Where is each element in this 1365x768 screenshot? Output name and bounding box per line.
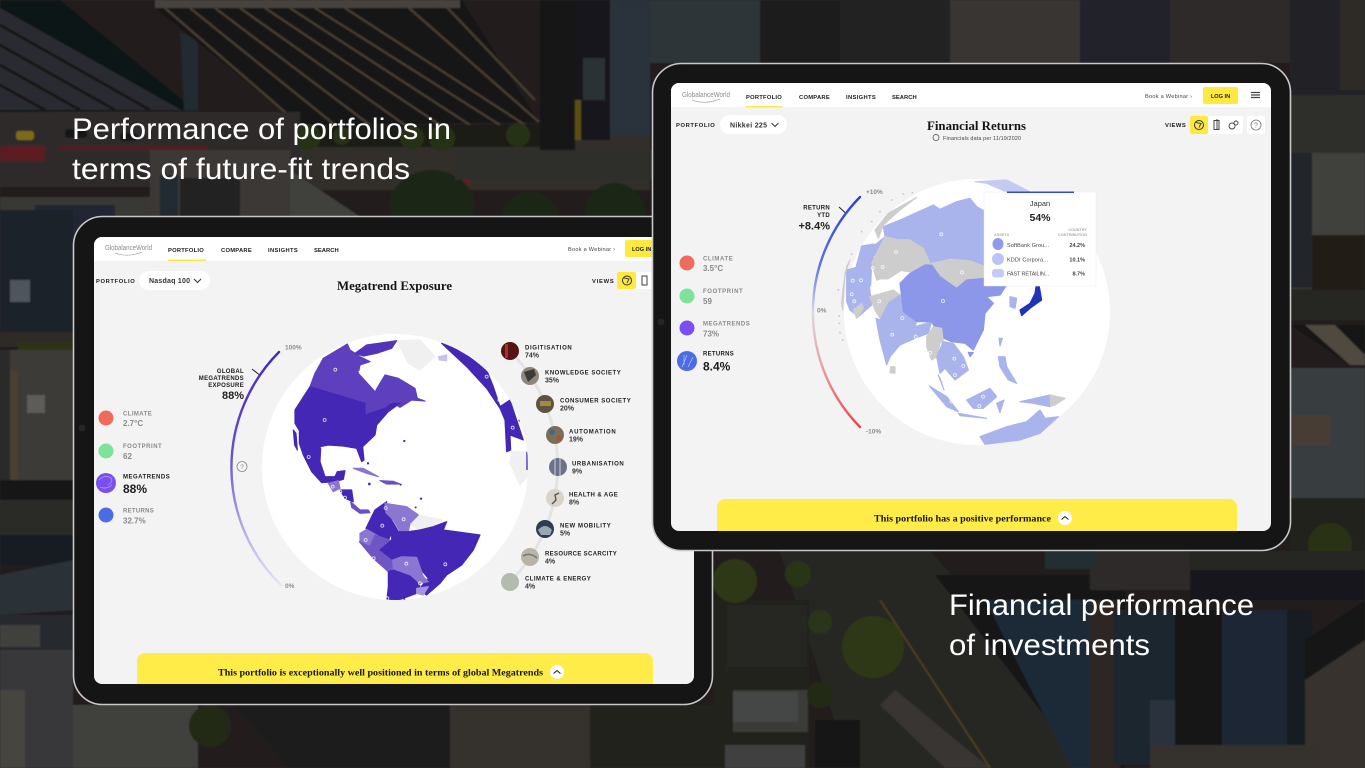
screen [671,83,1271,531]
left metrics: 88% [123,482,147,496]
return arc: 0% [817,308,827,314]
top navigation: COMPARE [221,248,252,254]
asset rows: 8.7% [1072,272,1085,278]
megatrend list: 9% [572,468,583,476]
left metrics: 62 [123,452,132,461]
exposure arc: GLOBAL [217,369,244,375]
heading: financial performance [949,589,1254,662]
left metrics [96,410,170,526]
tablet: megatrend exposure [74,216,712,704]
street with red lane [0,112,650,190]
left metrics: MEGATRENDS [703,322,750,328]
title: Financial Returns [927,119,1026,133]
portfolio selector [676,115,787,134]
megatrend list: 35% [545,378,560,384]
top navigation: LOG IN [632,247,651,253]
megatrend list: 8% [569,500,580,506]
country tooltip: 54% [1029,212,1051,224]
exposure arc: ? [240,464,244,471]
country tooltip: COUNTRY [1068,228,1087,232]
views toolbar [1165,116,1265,134]
trees bottom [713,523,1352,708]
top navigation: GlobalanceWorld [682,92,730,99]
top right buildings [650,0,1365,95]
heading: future-fit trends: Performance of portfolios in [72,113,451,146]
exposure arc: 88% [222,390,244,402]
left metrics: 59 [703,297,712,306]
top navigation: SEARCH [314,248,339,254]
left metrics: 8.4% [703,360,731,374]
top navigation: SEARCH [892,95,917,101]
tower striped top [155,0,539,125]
portfolio selector [96,271,210,290]
left metrics: RETURNS [703,352,734,358]
asset rows [992,238,1085,278]
left metrics: CLIMATE [123,412,152,418]
megatrend list [501,342,631,591]
heading: future-fit trends [72,113,451,186]
summary banner [717,499,1237,531]
left metrics: CLIMATE [703,256,733,262]
megatrend list: CONSUMER SOCIETY [560,398,631,404]
left metrics: 32.7% [123,516,146,526]
bottom left buildings [73,705,720,768]
summary banner [137,653,653,684]
megatrend list: 74% [525,352,540,360]
heading: financial performance: of investments [949,629,1150,662]
left metrics: 73% [703,330,719,338]
asset rows: SoftBank Grou... [1007,243,1049,249]
megatrend list: URBANISATION [572,462,624,468]
large trees [390,170,645,273]
asset rows: KDDI Corpora... [1007,258,1048,264]
exposure arc: MEGATRENDS [199,376,244,382]
trees row [295,123,530,151]
title: Megatrend Exposure [337,279,452,293]
exposure arc: 100% [285,344,302,352]
dark diagonal shadow and blue roof [935,551,1365,768]
left metrics: MEGATRENDS [123,474,170,480]
views toolbar [592,272,652,289]
return arc: +8.4% [798,220,830,232]
heading: financial performance: Financial performance [949,589,1254,622]
views toolbar: VIEWS [592,279,614,285]
views toolbar: ? [1254,122,1258,130]
top navigation: COMPARE [799,95,830,101]
top navigation: Book a Webinar › [1145,94,1192,100]
screen [94,237,694,684]
megatrend list: AUTOMATION [569,430,616,436]
left metrics: 2.7°C [123,419,143,428]
top navigation: LOG IN [1211,94,1230,100]
left metrics [677,256,750,374]
right strip [1290,95,1365,553]
globe: Americas [262,334,533,602]
road diagonal [780,551,1120,768]
exposure arc [199,344,302,590]
megatrend list: HEALTH & AGE [569,492,618,498]
megatrend list: 5% [560,530,571,538]
top navigation [671,83,1271,108]
return arc: RETURN [803,206,830,212]
megatrend list: CLIMATE & ENERGY [525,576,591,582]
summary banner: This portfolio is exceptionally well positioned in terms of global Megatrends [218,668,543,678]
roofs under heading [0,150,380,275]
megatrend list: 4% [525,584,536,590]
tablet: financial returns [652,64,1290,550]
portfolio selector: PORTFOLIO [676,123,715,129]
title: Financials data per 11/19/2020 [943,136,1021,142]
heading: future-fit trends: terms of future-fit trends [72,153,410,186]
country tooltip: Japan [1030,199,1050,208]
views toolbar: VIEWS [1165,123,1186,129]
tower top left [0,0,198,112]
exposure arc: EXPOSURE [208,383,244,389]
left metrics: 3.5°C [703,264,723,273]
top navigation: GlobalanceWorld [105,245,152,252]
megatrend list: 20% [560,406,575,412]
return arc: +10% [866,189,883,196]
exposure arc: 0% [285,583,295,590]
top navigation: Book a Webinar › [568,247,615,253]
left strip [0,210,73,768]
megatrend list: DIGITISATION [525,346,572,352]
globe: Asia [837,179,1110,445]
asset rows: 10.1% [1069,258,1085,264]
country tooltip: CONTRIBUTION [1058,233,1087,237]
top navigation: PORTFOLIO [168,248,204,254]
portfolio selector: Nikkei 225 [730,122,767,130]
top navigation [94,237,694,261]
country tooltip: ASSETS [994,233,1010,237]
left metrics: FOOTPRINT [123,444,162,450]
portfolio selector: Nasdaq 100 [149,278,190,285]
portfolio selector: PORTFOLIO [96,279,135,285]
top navigation: INSIGHTS [846,95,876,101]
left metrics: FOOTPRINT [703,289,743,295]
return arc: -10% [866,428,881,436]
block beside road [714,600,860,768]
megatrend list: 4% [545,558,556,566]
country tooltip [984,192,1096,286]
asset rows: 24.2% [1069,243,1085,249]
summary banner: This portfolio has a positive performance [874,514,1051,524]
megatrend list: KNOWLEDGE SOCIETY [545,370,621,376]
return arc [798,189,883,436]
dark block top [540,0,650,150]
top navigation: INSIGHTS [268,248,298,254]
megatrend list: 19% [569,436,584,444]
return arc: YTD [817,213,830,219]
road right top [455,150,655,180]
left metrics: RETURNS [123,508,154,514]
title [927,121,1026,141]
megatrend list: NEW MOBILITY [560,524,611,530]
top navigation: PORTFOLIO [746,95,782,101]
asset rows: FAST RETAILIN... [1007,272,1049,278]
megatrend list: RESOURCE SCARCITY [545,552,617,558]
